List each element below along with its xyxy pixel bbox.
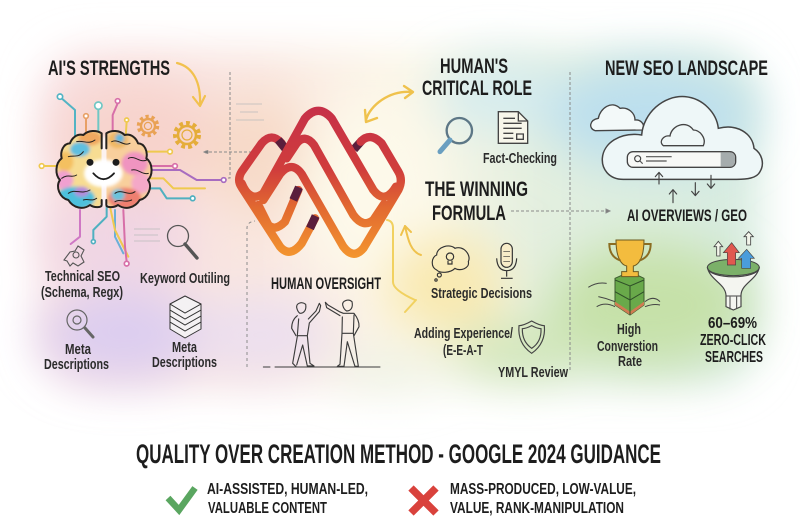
heading: AI's strengths: AI'S STRENGTHS xyxy=(48,57,170,80)
icon: gear magnifier xyxy=(67,310,93,337)
label: meta descriptions left xyxy=(44,342,109,373)
icon: keyword magnifier xyxy=(134,226,197,258)
icon: funnel with arrows xyxy=(707,232,759,310)
label: strategic decisions: Strategic Decisions xyxy=(431,286,532,302)
label: high conversion rate: Rate xyxy=(618,354,642,370)
label: meta descriptions left: Meta xyxy=(65,342,92,358)
label: YMYL review: YMYL Review xyxy=(498,365,569,381)
label: zero-click searches xyxy=(700,315,766,366)
label: zero-click searches: 60–69% xyxy=(708,315,757,332)
icon: brain with circuits xyxy=(39,94,226,266)
text: negative guidance: VALUE, RANK-MANIPULATION xyxy=(450,500,624,517)
label: technical SEO: (Schema, Regx) xyxy=(41,285,123,301)
label: AI overviews: AI OVERVIEWS / GEO xyxy=(627,206,747,225)
arrow: formula feedback xyxy=(401,226,421,255)
connector: dashed link to logo xyxy=(204,72,264,178)
icon: orange gear xyxy=(138,116,158,136)
icon: shield xyxy=(519,321,545,353)
label: meta descriptions right xyxy=(152,340,217,371)
label: high conversion rate: Converstion xyxy=(597,339,658,355)
arrow: double-headed to human role xyxy=(365,86,413,122)
text: positive guidance: AI-ASSISTED, HUMAN-LED, xyxy=(207,481,368,498)
label: human oversight: HUMAN OVERSIGHT xyxy=(271,274,381,293)
icon: fact-check magnifier xyxy=(440,118,472,152)
icon: red cross xyxy=(411,488,436,513)
label: fact-checking: Fact-Checking xyxy=(483,151,557,167)
label: adding experience: Adding Experience/ xyxy=(414,326,513,342)
icon: yellow gear xyxy=(175,123,199,147)
heading: the winning formula: FORMULA xyxy=(432,202,506,225)
text: positive guidance xyxy=(207,481,368,517)
icon: thought cloud with bulb xyxy=(432,246,469,281)
logo: interlaced ribbon mark xyxy=(239,111,401,254)
label: meta descriptions right: Meta xyxy=(172,340,198,356)
connector: dashed frame around people xyxy=(247,221,255,367)
text: negative guidance xyxy=(450,481,636,517)
label: technical SEO xyxy=(41,269,123,301)
heading: the winning formula: THE WINNING xyxy=(425,178,528,201)
heading: human's critical role: HUMAN'S xyxy=(440,55,508,78)
icon: document xyxy=(498,112,528,143)
icon: green check xyxy=(168,488,195,510)
label: meta descriptions left: Descriptions xyxy=(44,357,109,373)
heading: human's critical role: CRITICAL ROLE xyxy=(422,77,532,100)
label: zero-click searches: SEARCHES xyxy=(705,349,763,366)
text: positive guidance: VALUABLE CONTENT xyxy=(208,500,327,517)
label: meta descriptions right: Descriptions xyxy=(152,355,217,371)
label: adding experience: (E-E-A-T xyxy=(443,343,483,359)
icon: traffic arrows xyxy=(655,172,715,203)
connector: formula to new SEO landscape xyxy=(511,209,610,213)
text: negative guidance: MASS-PRODUCED, LOW-VALUE, xyxy=(450,481,636,498)
icon: layer stack xyxy=(170,296,201,338)
label: keyword outlining: Keyword Outiling xyxy=(140,271,230,287)
label: zero-click searches: ZERO-CLICK xyxy=(700,332,766,349)
heading: the winning formula xyxy=(425,178,528,225)
illustration: cloud with search bar xyxy=(591,97,762,179)
label: adding experience xyxy=(414,326,513,359)
arrow: strengths to gears xyxy=(177,63,205,106)
label: high conversion rate xyxy=(597,322,658,370)
icon: microphone xyxy=(497,243,517,278)
icon: small settings gear xyxy=(64,246,84,266)
arrow: logo to strategic decisions xyxy=(387,220,416,312)
heading: human's critical role xyxy=(422,55,532,100)
divider: vertical dashed line xyxy=(569,72,571,372)
label: technical SEO: Technical SEO xyxy=(45,269,120,285)
label: high conversion rate: High xyxy=(617,322,641,338)
illustration: two people high-five xyxy=(263,300,380,367)
icon: trophy on block xyxy=(588,240,660,315)
